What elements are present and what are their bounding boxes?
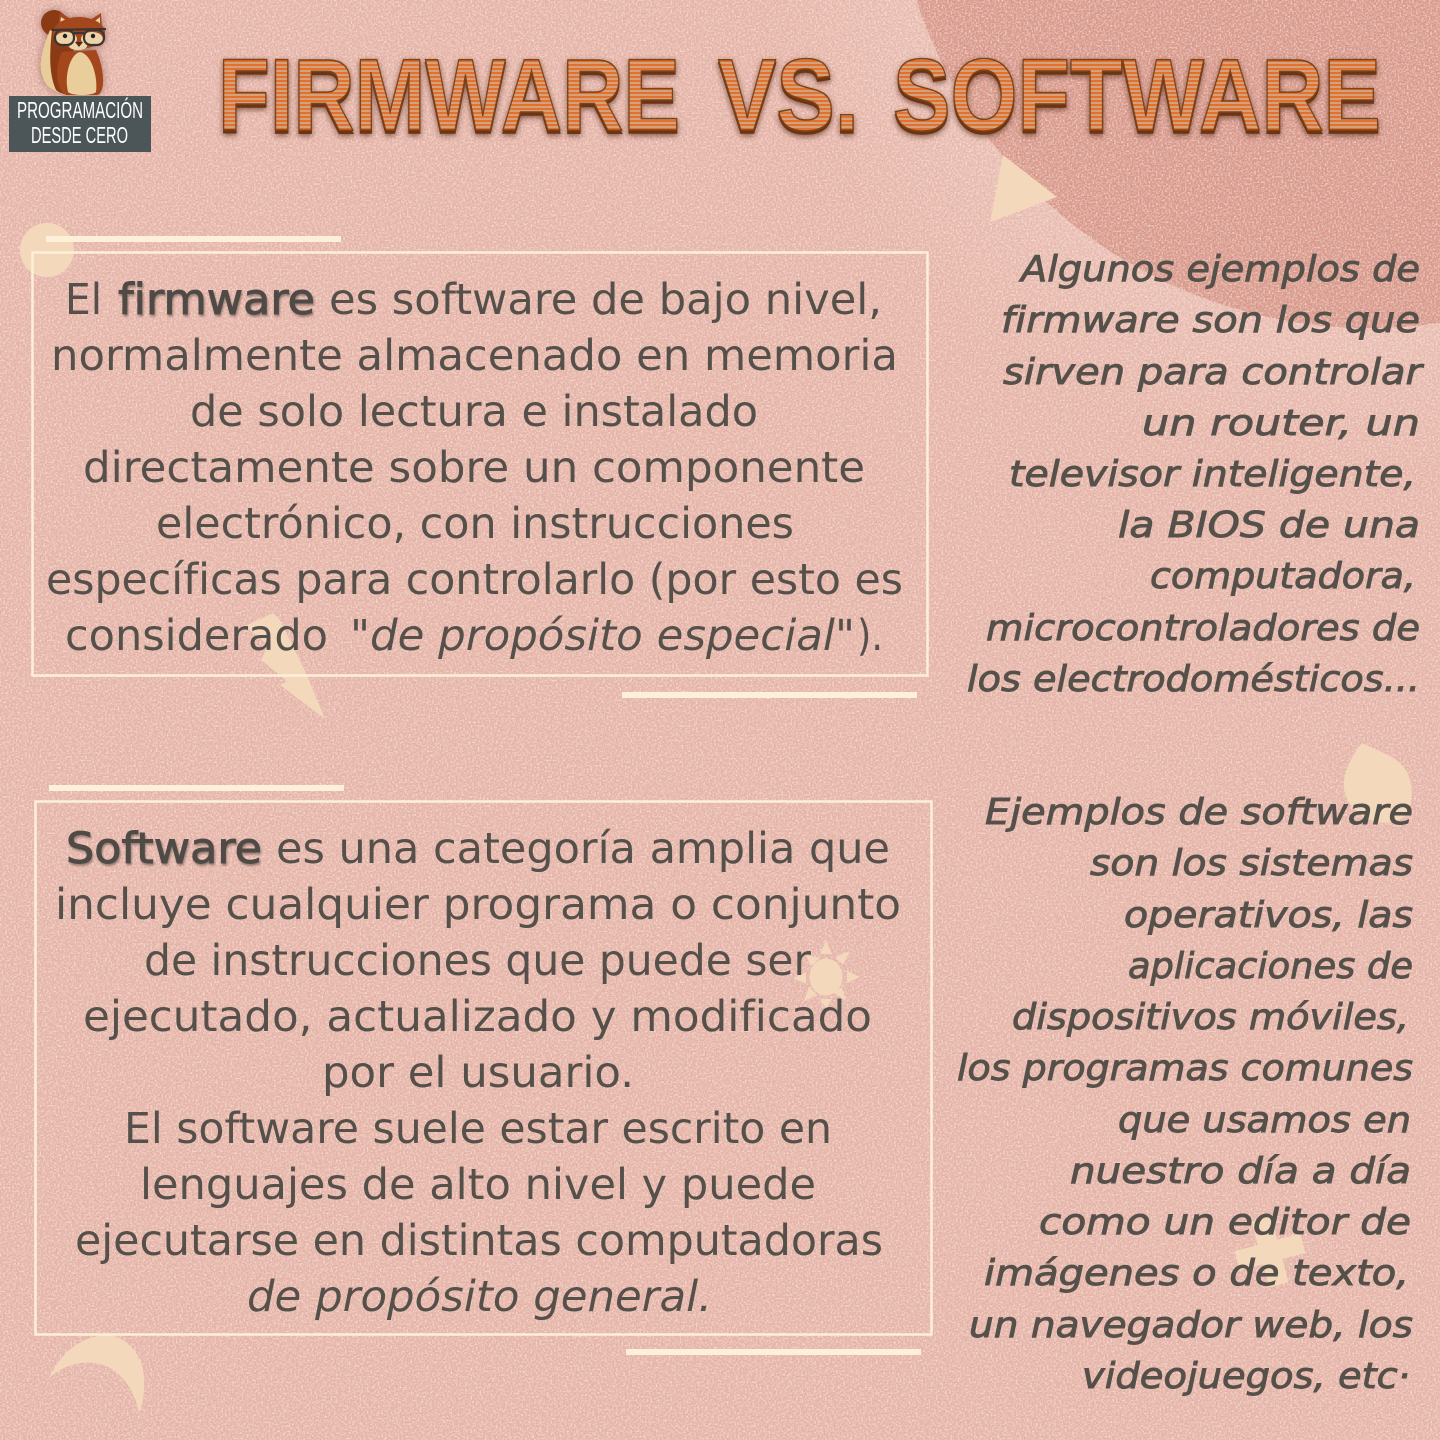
panel: software definition: Software: [66, 824, 262, 874]
panel: firmware definition: es software de bajo nivel,: [329, 275, 882, 325]
panel: firmware definition: El: [65, 275, 102, 325]
icon: decorative crescent moon: [49, 1335, 144, 1413]
text block: software examples: videojuegos, etc·: [1082, 1356, 1410, 1397]
panel: software definition: es una categoría amplia que: [276, 824, 890, 874]
icon: decorative leaf: [1344, 743, 1412, 823]
panel: firmware definition: directamente sobre un componente: [83, 443, 865, 493]
panel: firmware definition: firmware: [118, 275, 315, 325]
panel: software definition: ejecutarse en distintas computadoras: [75, 1216, 883, 1266]
text block: software examples: son los sistemas: [1090, 843, 1413, 884]
text block: firmware examples: los electrodomésticos...: [967, 659, 1420, 700]
text block: software examples: nuestro día a día: [1070, 1151, 1411, 1192]
text block: software examples: que usamos en: [1118, 1100, 1411, 1141]
text block: software examples: imágenes o de texto,: [984, 1253, 1409, 1294]
logo banner: PROGRAMACIÓN: [17, 97, 143, 123]
text block: software examples: como un editor de: [1039, 1202, 1411, 1243]
panel: firmware definition: electrónico, con instrucciones: [156, 499, 794, 549]
panel: software definition: de instrucciones que puede ser: [144, 936, 811, 986]
panel: firmware definition: "de propósito especial": [350, 611, 855, 661]
panel: software definition: de propósito general.: [247, 1272, 712, 1322]
text block: firmware examples: firmware son los que: [1001, 300, 1420, 341]
panel: software definition: lenguajes de alto nivel y puede: [140, 1160, 816, 1210]
text block: firmware examples: microcontroladores de: [986, 608, 1420, 649]
panel: firmware definition: específicas para controlarlo (por esto es: [46, 555, 903, 605]
panel: software definition: incluye cualquier programa o conjunto: [55, 880, 901, 930]
text block: firmware examples: Algunos ejemplos de: [1019, 249, 1420, 290]
text block: software examples: Ejemplos de software: [985, 792, 1413, 833]
text block: software examples: aplicaciones de: [1128, 946, 1413, 987]
text block: software examples: un navegador web, los: [969, 1305, 1413, 1346]
icon: decorative circle: [20, 223, 74, 277]
text block: software examples: los programas comunes: [957, 1048, 1413, 1089]
icon: decorative sun: [794, 941, 860, 1009]
logo banner: [9, 96, 151, 152]
panel: firmware definition: ).: [857, 611, 883, 661]
text block: software examples: [957, 792, 1413, 1397]
icon: decorative plus: [1228, 1210, 1312, 1294]
panel: firmware definition: normalmente almacenado en memoria: [51, 331, 898, 381]
icon: decorative triangle: [990, 155, 1057, 222]
panel: software definition: por el usuario.: [322, 1048, 634, 1098]
panel: software definition: El software suele estar escrito en: [124, 1104, 832, 1154]
panel: software definition: ejecutado, actualizado y modificado: [83, 992, 872, 1042]
text block: software examples: dispositivos móviles,: [1012, 997, 1409, 1038]
text block: firmware examples: un router, un: [1142, 403, 1420, 444]
text block: firmware examples: televisor inteligente,: [1009, 454, 1416, 495]
text block: software examples: operativos, las: [1124, 895, 1413, 936]
title: FIRMWARE: [218, 38, 680, 152]
text block: firmware examples: sirven para controlar: [1003, 352, 1424, 393]
text block: firmware examples: la BIOS de una: [1118, 505, 1420, 546]
panel: firmware definition: de solo lectura e instalado: [190, 387, 758, 437]
text block: firmware examples: [967, 249, 1424, 700]
logo banner: DESDE CERO: [31, 122, 128, 148]
title: VS.: [718, 38, 859, 152]
icon: decorative lightning bolt: [245, 613, 325, 719]
panel: software definition: [36, 785, 932, 1355]
text block: firmware examples: computadora,: [1150, 556, 1416, 597]
panel: firmware definition: considerado: [65, 611, 328, 661]
panel: firmware definition: [32, 236, 928, 698]
logo: squirrel with glasses: [41, 10, 106, 95]
title: [218, 38, 1381, 152]
